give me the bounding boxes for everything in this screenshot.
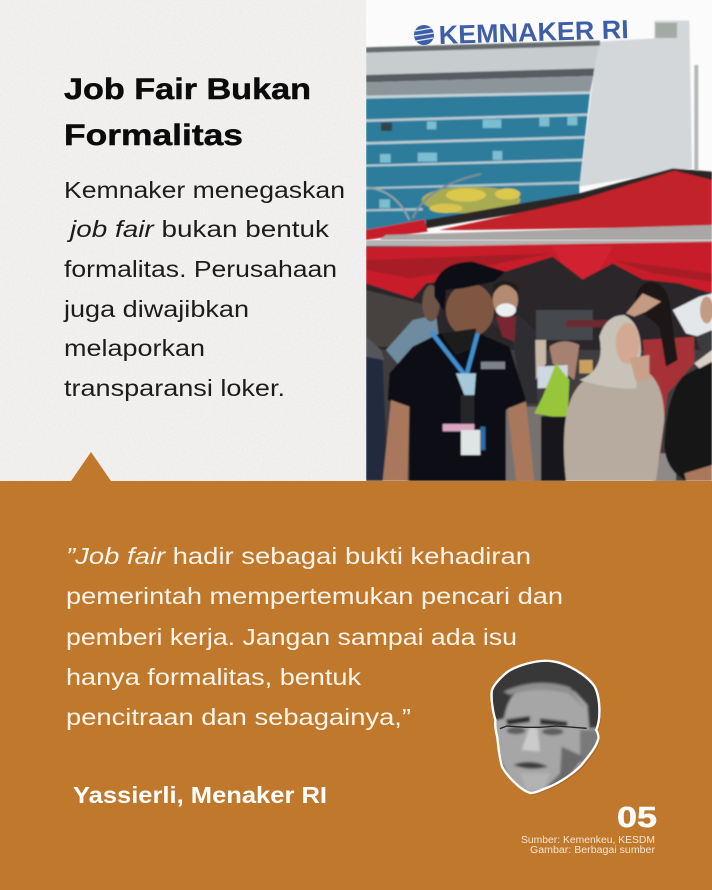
text block: intro paragraph: juga diwajibkan	[63, 296, 249, 322]
woman in grey hijab	[564, 373, 664, 481]
building and red tent roof	[366, 21, 712, 240]
text block: quote: pencitraan dan sebagainya,”	[66, 704, 411, 730]
page number: 05	[617, 802, 657, 834]
woman in red plaid	[643, 337, 694, 462]
text block: intro paragraph: Kemnaker menegaskan	[64, 177, 345, 203]
text block: intro paragraph: job fair bukan bentuk	[66, 216, 329, 242]
title	[64, 73, 311, 152]
right foreground person	[664, 360, 712, 481]
text block: sources	[521, 835, 656, 856]
panel: quote background	[0, 481, 712, 890]
title: Job Fair Bukan	[64, 73, 311, 106]
text block: sources: Gambar: Berbagai sumber	[530, 845, 656, 856]
text block: intro paragraph: transparansi loker.	[64, 375, 285, 401]
photo: Kemnaker building and job fair crowd	[366, 0, 712, 482]
background people	[366, 337, 384, 360]
sign: KEMNAKER RI lettering: KEMNAKER RI	[438, 14, 629, 50]
text block: quote	[66, 543, 563, 730]
text block: quote: pemberi kerja. Jangan sampai ada isu	[66, 624, 517, 650]
text block: intro paragraph: formalitas. Perusahaan	[64, 256, 337, 282]
text block: intro paragraph: melaporkan	[64, 335, 205, 361]
text block: intro paragraph	[63, 177, 345, 401]
icon: portrait of Yassierli	[490, 660, 601, 794]
text block: sources: Sumber: Kemenkeu, KESDM	[521, 835, 655, 846]
icon: Kemnaker logo	[414, 25, 434, 45]
text block: quote: hanya formalitas, bentuk	[66, 664, 361, 690]
man in black shirt	[388, 333, 526, 481]
text block: quote: pemerintah mempertemukan pencari dan	[66, 583, 563, 609]
text block: quote: ”Job fair hadir sebagai bukti kehadiran	[66, 543, 531, 569]
panel: paper background	[0, 0, 366, 481]
icon: pointer triangle	[71, 452, 111, 481]
text: speaker name: Yassierli, Menaker RI	[73, 782, 327, 808]
title: Formalitas	[64, 119, 243, 152]
crowd under red tent	[366, 240, 712, 482]
